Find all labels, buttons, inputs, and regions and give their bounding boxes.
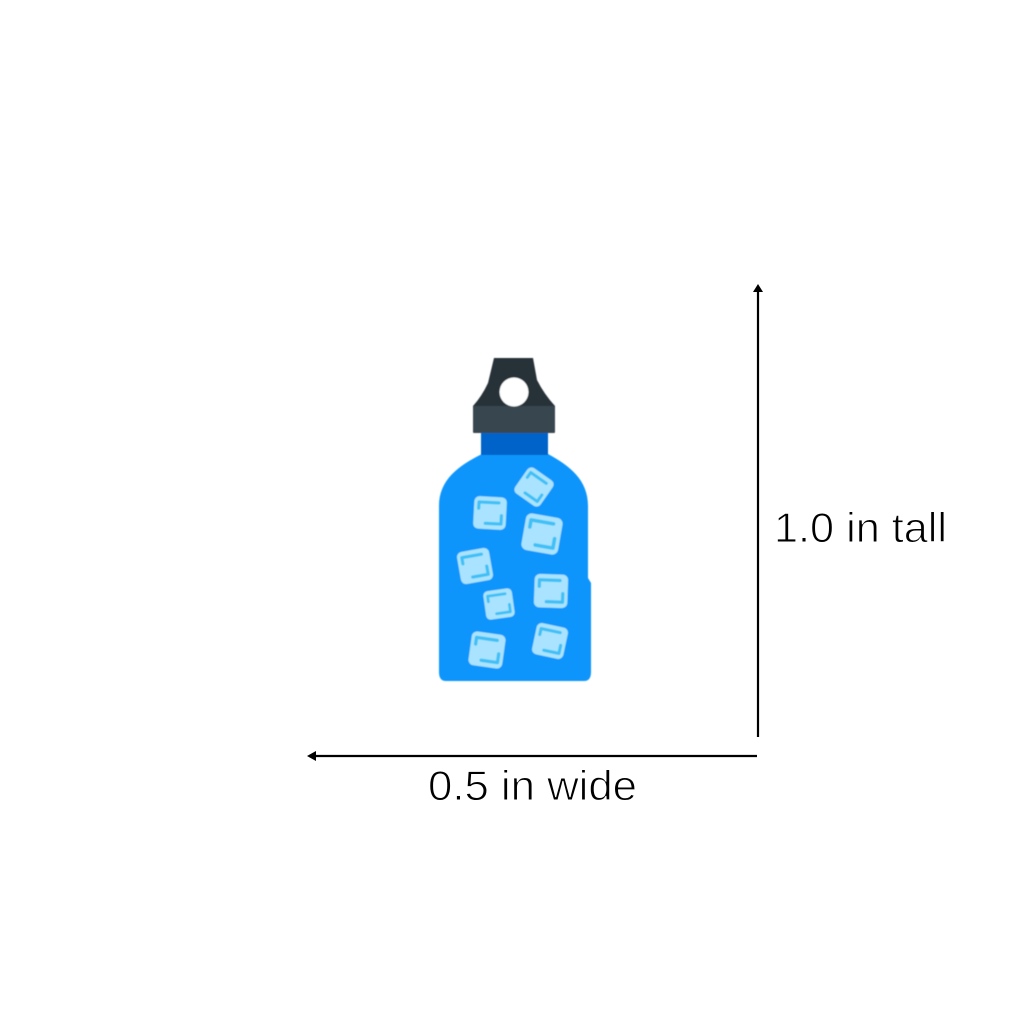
cap hole bbox=[500, 378, 528, 406]
ice cubes bbox=[456, 465, 569, 669]
label: height: 1.0 in tall bbox=[774, 504, 947, 551]
bottle cap collar bbox=[473, 406, 555, 433]
bottle neck bbox=[481, 431, 548, 455]
icon: water bottle with ice cubes bbox=[439, 358, 591, 681]
label: width: 0.5 in wide bbox=[428, 762, 637, 809]
arrow: height bbox=[753, 284, 763, 737]
bottle body bbox=[439, 454, 591, 681]
bottle cap top bbox=[473, 358, 555, 410]
arrow: width bbox=[307, 751, 757, 761]
